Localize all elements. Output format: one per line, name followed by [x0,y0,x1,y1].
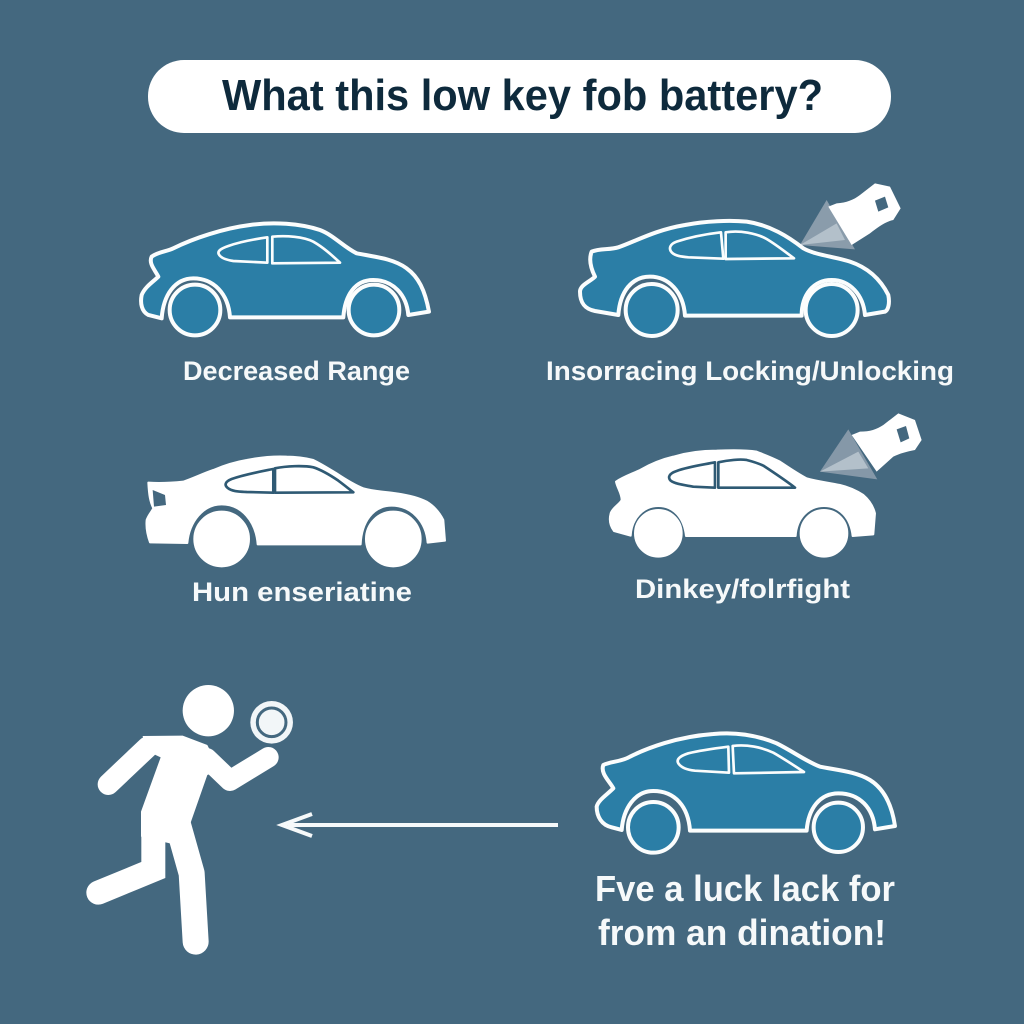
label: decreased range: Decreased Range [183,356,410,386]
limbs [98,747,268,942]
icon: key fob signal [820,413,922,479]
torso [141,736,220,843]
arrow pointing to person [282,814,558,836]
closing message: Fve a luck lack for [595,868,895,909]
head [183,685,234,736]
title banner [148,60,891,133]
car: decreased range [141,223,429,335]
blue car: bottom right [597,733,895,853]
key fob ring [250,701,293,744]
label: locking and unlocking: Insorracing Locking/Unlocking [546,356,954,386]
icon: key fob signal [800,183,901,249]
icon: running person holding key fob [98,685,293,942]
label: dinkey folrfight: Dinkey/folrfight [635,574,850,604]
closing message: from an dination! [598,912,886,953]
white car with key fob [610,413,922,557]
label: hun enseriatine: Hun enseriatine [192,577,412,607]
white car: hun enseriatine [146,456,445,566]
closing message [595,868,895,953]
title text: What this low key fob battery? [222,71,823,120]
car with key fob: locking and unlocking [580,183,901,336]
